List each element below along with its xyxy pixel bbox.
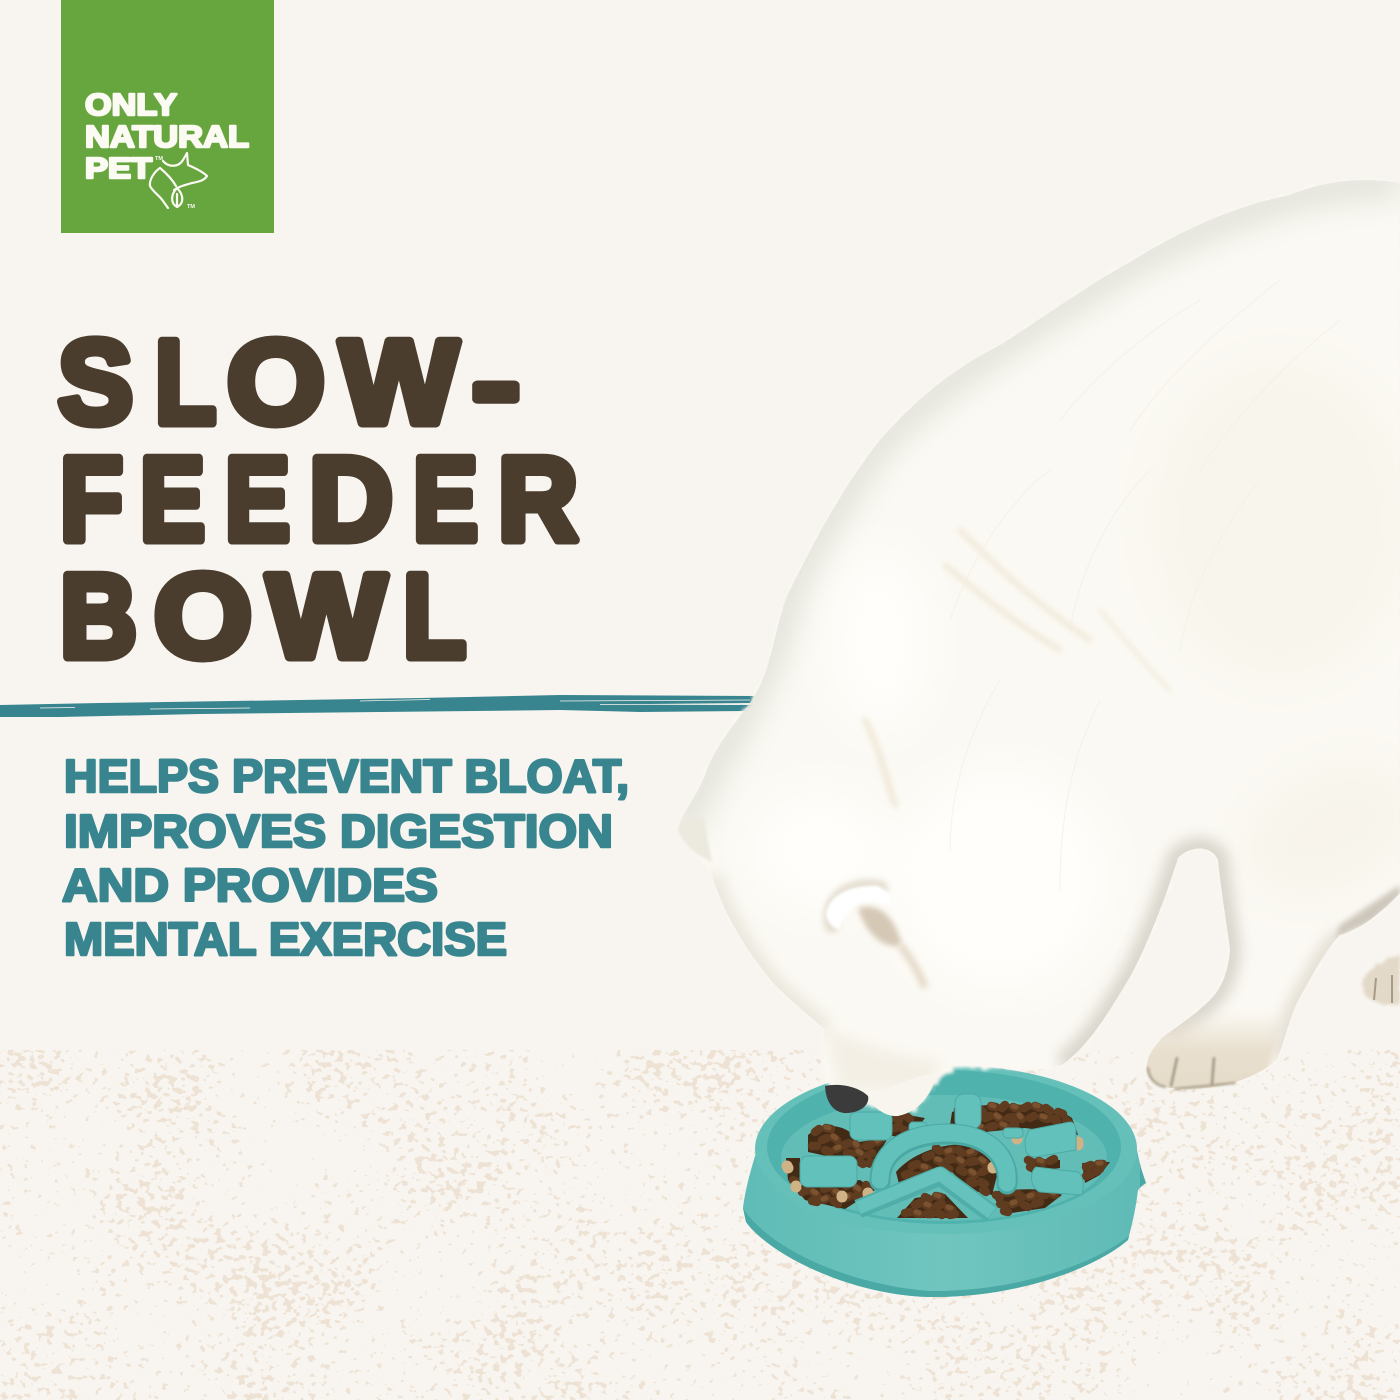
- kibble: [786, 1104, 1110, 1218]
- dog ear: [826, 886, 925, 988]
- logo wordmark: NATURAL: [85, 119, 249, 154]
- title: Slow-Feeder Bowl: E: [225, 433, 290, 566]
- fur strands: [950, 280, 1340, 890]
- shaded lower-left head edge: [712, 875, 825, 1030]
- subheading: benefits: [62, 750, 629, 965]
- logo trademark marks: TM: [155, 156, 163, 162]
- title: Slow-Feeder Bowl: L: [403, 550, 466, 683]
- title: Slow-Feeder Bowl: F: [60, 433, 123, 566]
- title: Slow-Feeder Bowl: [58, 316, 578, 683]
- bowl rim: [755, 1065, 1137, 1233]
- logo wordmark: [85, 87, 249, 185]
- title: Slow-Feeder Bowl: W: [340, 316, 459, 449]
- tan kibble: [787, 1138, 1078, 1197]
- logo trademark marks: TM: [187, 204, 195, 210]
- dog side ear: [678, 818, 712, 862]
- dog front paw toes: [1148, 1058, 1235, 1089]
- dog far paw: [1362, 953, 1400, 1005]
- bowl: [743, 1065, 1146, 1297]
- kibble shadow base: [786, 1104, 1110, 1218]
- title: Slow-Feeder Bowl: O: [227, 316, 325, 449]
- title: Slow-Feeder Bowl: D: [309, 433, 393, 566]
- grey upper back edge: [678, 182, 1400, 830]
- subheading: benefits: AND PROVIDES: [62, 859, 438, 911]
- fur creases: [865, 530, 1170, 805]
- dog fur shading: [678, 182, 1400, 1095]
- kibble pieces: [793, 1105, 1103, 1215]
- bowl interior wall: [767, 1070, 1121, 1224]
- feeder ridges: [800, 1094, 1083, 1195]
- underside grey fur: [1335, 885, 1400, 938]
- dog body: [678, 180, 1400, 1111]
- subheading: benefits: MENTAL EXERCISE: [64, 913, 507, 965]
- dog nose: [825, 1085, 868, 1113]
- logo badge: [61, 0, 274, 233]
- title: Slow-Feeder Bowl: E: [413, 433, 478, 566]
- title: Slow-Feeder Bowl: R: [498, 433, 578, 566]
- title: Slow-Feeder Bowl: W: [267, 550, 387, 683]
- title: Slow-Feeder Bowl: O: [154, 550, 252, 683]
- title: Slow-Feeder Bowl: L: [155, 316, 216, 449]
- logo wordmark: PET: [85, 153, 152, 185]
- logo dog and cat outline icon: [150, 153, 207, 208]
- logo trademark marks: [155, 156, 195, 210]
- dog: [678, 180, 1400, 1116]
- dog muzzle: [866, 1075, 936, 1116]
- title: Slow-Feeder Bowl: B: [60, 550, 137, 683]
- feeder arch: [880, 1133, 1007, 1184]
- bright chest and head: [750, 550, 1110, 990]
- title: Slow-Feeder Bowl: S: [58, 316, 133, 449]
- warm body tones: [1150, 360, 1400, 922]
- speckled floor: [0, 1050, 1400, 1400]
- bowl floor: [781, 1095, 1107, 1221]
- bowl side tab: [1140, 1165, 1146, 1187]
- subheading: benefits: IMPROVES DIGESTION: [64, 805, 613, 857]
- title: Slow-Feeder Bowl: -: [472, 316, 520, 449]
- subheading: benefits: HELPS PREVENT BLOAT,: [64, 750, 629, 802]
- shaded edges around the leg gap: [1062, 848, 1230, 1065]
- feeder wedge: [858, 1174, 992, 1214]
- logo wordmark: ONLY: [85, 87, 177, 122]
- title: Slow-Feeder Bowl: E: [140, 433, 205, 566]
- bowl front rim lip: [770, 1175, 1118, 1234]
- chin and lower face shadow: [831, 1036, 936, 1094]
- shaded right edge of the leg: [1277, 935, 1340, 1060]
- bowl outer body: [743, 1150, 1145, 1297]
- front paw beige tone: [1146, 1020, 1277, 1089]
- kibble highlights: [813, 1105, 1101, 1213]
- brush stroke divider: [0, 695, 754, 717]
